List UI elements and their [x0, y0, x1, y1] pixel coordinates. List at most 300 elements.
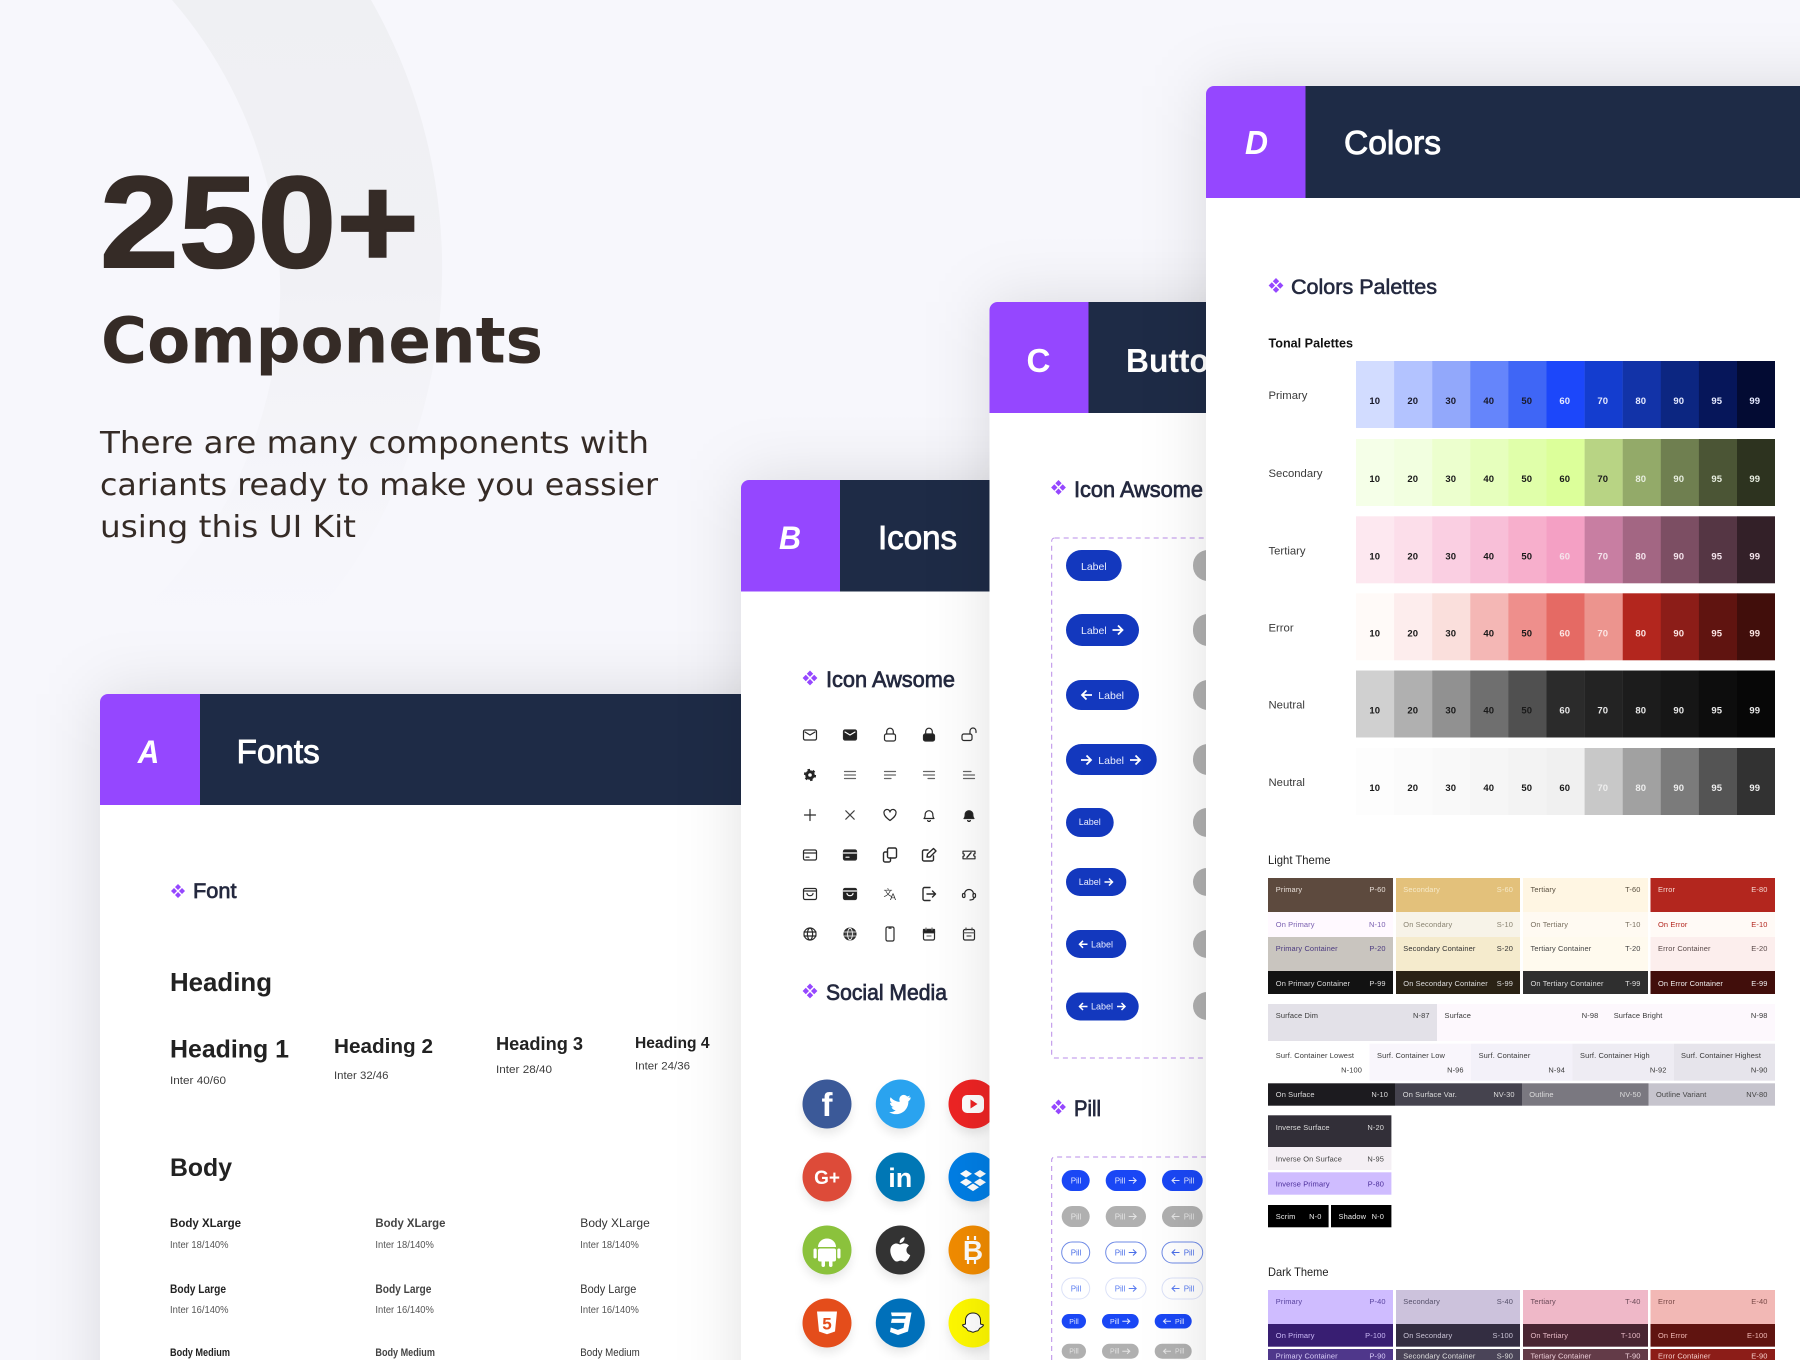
heading styles: Inter 40/60 — [170, 1075, 226, 1087]
panel D header — [1206, 86, 1800, 198]
dark theme: core color roles: Tertiary — [1530, 1297, 1556, 1306]
light theme: core color roles: T-10 — [1625, 920, 1640, 929]
light theme: core color roles: Secondary — [1403, 885, 1440, 894]
panel A header: A — [137, 734, 159, 770]
light theme: core color roles — [1268, 878, 1775, 994]
light theme: core color roles: On Primary — [1276, 920, 1315, 929]
heading: Pill — [1051, 1096, 1101, 1121]
description text: There are many components with — [99, 426, 649, 461]
button: label with both arrows — [1066, 744, 1157, 775]
light theme: inverse roles: Inverse On Surface — [1276, 1154, 1342, 1164]
tonal palette: primary: 60 — [1559, 396, 1570, 407]
subtitle: Components: Components — [101, 304, 543, 378]
tonal palette: primary: 40 — [1483, 396, 1494, 407]
tonal palette: neutral — [1268, 670, 1775, 738]
pills: disabled: Pill — [1071, 1212, 1082, 1221]
light theme: core color roles: E-20 — [1751, 944, 1768, 953]
icon: google plus — [802, 1152, 852, 1202]
pills: small disabled: Pill — [1175, 1349, 1185, 1356]
light theme: core color roles: On Secondary — [1403, 920, 1452, 929]
pills: small primary: Pill — [1069, 1319, 1079, 1326]
heading styles: Inter 24/36 — [635, 1060, 690, 1072]
tonal palette: error: 99 — [1749, 628, 1760, 639]
pills: small disabled — [1062, 1344, 1192, 1359]
tonal palette: tertiary: 30 — [1445, 551, 1456, 562]
light theme: core color roles: S-10 — [1497, 920, 1513, 929]
body styles: Inter 18/140% — [375, 1240, 434, 1251]
tonal palette: neutral light: 60 — [1559, 783, 1570, 794]
icon: facebook: f — [822, 1086, 834, 1123]
light theme: surface containers: Surf. Container Lowest — [1276, 1051, 1355, 1060]
icon: bell filled — [964, 811, 974, 821]
button: label with left arrow — [1066, 680, 1139, 710]
icon: google plus: G+ — [814, 1168, 840, 1189]
small button: both arrows: Label — [1091, 1002, 1113, 1012]
dark theme: core color roles: T-40 — [1625, 1297, 1640, 1306]
icon: linkedin: in — [888, 1163, 912, 1193]
tonal palette: error: 30 — [1445, 628, 1456, 639]
light theme: scrim and shadow — [1268, 1205, 1391, 1227]
icon: translate — [884, 886, 896, 902]
heading: Font: Font — [193, 880, 237, 903]
tonal palette: neutral: 99 — [1749, 706, 1760, 716]
description text — [99, 426, 659, 545]
button: label with right arrow: Label — [1081, 625, 1107, 637]
tonal palette: secondary: 90 — [1673, 474, 1684, 485]
tonal palette: neutral: 95 — [1711, 706, 1723, 716]
light theme: surface containers: N-100 — [1341, 1066, 1362, 1074]
tonal palette: tertiary — [1268, 516, 1775, 583]
pills: small disabled: Pill — [1110, 1349, 1120, 1356]
social media icons — [802, 1080, 998, 1353]
pills: primary: Pill — [1071, 1176, 1082, 1185]
body styles: Inter 16/140% — [375, 1305, 434, 1316]
panel A header: Fonts — [237, 733, 320, 770]
icon: align justify — [844, 772, 856, 778]
icon: dropbox — [948, 1152, 998, 1202]
tonal palette: secondary: 70 — [1597, 474, 1608, 485]
heading styles: Heading 3 — [496, 1033, 583, 1054]
tonal palette: neutral: 90 — [1673, 706, 1684, 716]
body styles: Body Large — [375, 1282, 432, 1296]
description text: using this UI Kit — [100, 510, 356, 545]
tonal palette: primary: 30 — [1445, 396, 1456, 407]
icon: android — [802, 1226, 852, 1274]
icon: discount ticket — [963, 851, 975, 859]
tonal palette: tertiary: 50 — [1521, 551, 1532, 562]
tonal palette: error: 60 — [1559, 628, 1570, 639]
description text: cariants ready to make you eassier — [100, 468, 659, 503]
icon: copy — [884, 848, 896, 862]
icon: snapchat — [948, 1298, 998, 1348]
icon: calendar filled — [924, 928, 934, 940]
icon: html5 — [802, 1298, 852, 1348]
light theme: core color roles: T-99 — [1625, 979, 1640, 988]
tonal palette: primary: 95 — [1711, 396, 1723, 407]
icon: globe filled — [844, 928, 856, 940]
dark theme: core color roles: Secondary — [1403, 1297, 1440, 1306]
body styles: Body XLarge — [375, 1216, 446, 1230]
tonal palette: error: 40 — [1483, 628, 1494, 639]
light theme: surface containers: N-94 — [1548, 1066, 1565, 1074]
tonal palette: tertiary: Tertiary — [1268, 545, 1306, 557]
light theme: core color roles: T-60 — [1625, 885, 1640, 894]
tonal palette: error: 95 — [1711, 628, 1723, 639]
pills: light outline: Pill — [1071, 1284, 1082, 1293]
light theme: surfaces: N-98 — [1582, 1011, 1598, 1020]
light theme: core color roles: E-99 — [1751, 979, 1768, 988]
light theme: on surface and outline: NV-80 — [1746, 1090, 1768, 1099]
tonal palette: tertiary: 95 — [1711, 551, 1723, 562]
icon: mobile phone — [886, 927, 894, 941]
panel D header: D — [1245, 124, 1268, 161]
pills: small primary: Pill — [1110, 1319, 1120, 1326]
panel C header: Buttons — [1126, 342, 1246, 379]
tonal palette: secondary: Secondary — [1268, 468, 1323, 480]
pills: small primary — [1062, 1314, 1192, 1328]
light theme: core color roles: Error — [1658, 885, 1676, 894]
tonal palette: tertiary: 80 — [1635, 551, 1646, 562]
icon: bitcoin: B — [963, 1235, 983, 1266]
light theme: surface containers: Surf. Container — [1479, 1051, 1531, 1060]
icon: linkedin — [876, 1152, 925, 1202]
tonal palette: error: 50 — [1521, 628, 1532, 639]
tonal palette: neutral light: 50 — [1521, 783, 1532, 794]
tonal palette: tertiary: 90 — [1673, 551, 1684, 562]
tonal palette: tertiary: 60 — [1559, 551, 1570, 562]
dark theme: core color roles: T-100 — [1621, 1331, 1640, 1340]
tonal palette: tertiary: 99 — [1749, 551, 1760, 562]
light theme: core color roles: Tertiary Container — [1530, 944, 1592, 953]
icon: mail filled — [844, 730, 856, 740]
light theme: surface containers: N-92 — [1650, 1066, 1666, 1074]
dark theme: core color roles: Error — [1658, 1297, 1676, 1306]
tonal palette: tertiary: 10 — [1369, 551, 1380, 562]
light theme: core color roles: On Primary Container — [1276, 979, 1351, 988]
tonal palette: neutral light: 99 — [1749, 783, 1760, 794]
small button: label — [1066, 808, 1114, 837]
light theme: on surface and outline: Outline — [1529, 1090, 1554, 1099]
body styles: Inter 16/140% — [170, 1305, 229, 1316]
pills: primary: Pill — [1184, 1176, 1195, 1185]
body styles: Body Medium — [580, 1347, 640, 1359]
dark theme: core color roles: E-40 — [1751, 1297, 1768, 1306]
small button: both arrows — [1066, 992, 1139, 1020]
panel D header: Colors — [1344, 124, 1441, 161]
light theme: core color roles: On Tertiary — [1530, 920, 1568, 929]
light theme: on surface and outline: NV-50 — [1620, 1090, 1641, 1099]
tonal palette: neutral: 40 — [1483, 706, 1494, 716]
light theme: inverse roles: N-20 — [1367, 1123, 1384, 1132]
body styles: Body XLarge — [170, 1216, 241, 1230]
panel A: fonts — [82, 676, 741, 1360]
button: label with left arrow: Label — [1098, 690, 1124, 702]
light theme: scrim and shadow: N-0 — [1309, 1212, 1322, 1221]
tonal palette: neutral light: 40 — [1483, 783, 1494, 794]
heading: Colors Palettes: Colors Palettes — [1291, 275, 1437, 299]
light theme: core color roles: On Tertiary Container — [1530, 979, 1604, 988]
light theme: core color roles: E-10 — [1751, 920, 1768, 929]
dark theme: core color roles: On Error — [1658, 1331, 1688, 1340]
pills: outline — [1062, 1242, 1203, 1263]
icon: globe outline — [804, 928, 816, 940]
tonal palette: primary: 70 — [1597, 396, 1608, 407]
dark theme: core color roles — [1268, 1290, 1775, 1360]
heading styles: Heading 1 — [170, 1036, 289, 1064]
tonal palette: neutral light: 80 — [1635, 783, 1646, 794]
panel B: icons — [723, 462, 990, 1360]
icon: plus — [804, 810, 816, 820]
panel C: buttons — [972, 284, 1206, 1360]
light theme: core color roles: On Error Container — [1658, 979, 1723, 988]
light theme: core color roles: On Secondary Container — [1403, 979, 1488, 988]
dashed pill group — [1052, 1157, 1260, 1360]
dark theme: core color roles: Primary — [1276, 1297, 1302, 1306]
icon: calendar outline — [964, 928, 974, 940]
icon: edit — [922, 848, 936, 861]
tonal palette: neutral: Neutral — [1268, 700, 1305, 712]
button: label with both arrows: Label — [1098, 755, 1124, 767]
heading styles — [170, 967, 710, 1087]
body styles: Inter 18/140% — [580, 1240, 639, 1251]
dark theme: core color roles: On Tertiary — [1530, 1331, 1568, 1340]
heading: Tonal Palettes: Tonal Palettes — [1268, 336, 1353, 350]
tonal palette: error: 80 — [1635, 628, 1646, 639]
tonal palette: primary: 10 — [1369, 396, 1380, 407]
panel C header — [990, 302, 1290, 413]
tonal palette: primary — [1268, 361, 1775, 428]
icon: unlock — [962, 728, 976, 740]
icon: css3 — [876, 1298, 925, 1348]
pills: outline: Pill — [1071, 1248, 1082, 1257]
tonal palette: secondary: 95 — [1711, 474, 1723, 485]
pills: disabled — [1062, 1206, 1203, 1227]
button: label with right arrow — [1066, 614, 1139, 646]
tonal palette: neutral: 70 — [1597, 706, 1608, 716]
tonal palette: neutral light: Neutral — [1268, 777, 1305, 789]
tonal palette: neutral: 80 — [1635, 706, 1646, 716]
light theme: core color roles: On Error — [1658, 920, 1688, 929]
light theme: surfaces: N-98 — [1751, 1011, 1768, 1020]
pills: small disabled: Pill — [1069, 1349, 1079, 1356]
light theme: scrim and shadow: N-0 — [1372, 1212, 1384, 1221]
light theme: core color roles: N-10 — [1369, 920, 1386, 929]
pills: disabled: Pill — [1184, 1212, 1195, 1221]
tonal palette: secondary: 40 — [1483, 474, 1494, 485]
light theme: surfaces: N-87 — [1413, 1011, 1430, 1020]
small button: label: Label — [1079, 817, 1101, 827]
dark theme: core color roles: P-100 — [1365, 1331, 1386, 1340]
icon: lock outline — [884, 728, 896, 741]
icon: headset — [962, 890, 976, 900]
light theme: scrim and shadow: Shadow — [1338, 1212, 1367, 1221]
light theme: surface containers — [1276, 1044, 1775, 1081]
pills: disabled: Pill — [1115, 1212, 1126, 1221]
icon: wallet filled — [844, 888, 856, 900]
light theme: core color roles: S-60 — [1497, 885, 1513, 894]
icon: html5: 5 — [822, 1314, 832, 1334]
body styles: Body Large — [170, 1282, 226, 1296]
tonal palette: secondary: 50 — [1521, 474, 1532, 485]
pills: light outline: Pill — [1184, 1284, 1195, 1293]
pills: primary — [1062, 1170, 1203, 1191]
tonal palette: secondary: 60 — [1559, 474, 1570, 485]
icon: apple — [876, 1226, 925, 1274]
icon: translate: A — [890, 892, 896, 902]
tonal palette: primary: 50 — [1521, 396, 1532, 407]
tonal palette: neutral light: 70 — [1597, 783, 1608, 794]
small button: left arrow — [1066, 930, 1126, 958]
light theme: inverse roles: P-80 — [1368, 1180, 1384, 1188]
tonal palette: secondary: 99 — [1749, 474, 1760, 485]
heading: Pill: Pill — [1074, 1096, 1101, 1121]
light theme: surfaces: Surface Bright — [1614, 1011, 1663, 1020]
icon: close — [846, 811, 854, 819]
dark theme: core color roles: On Primary — [1276, 1331, 1315, 1340]
light theme: core color roles: E-80 — [1751, 885, 1768, 894]
light theme: inverse roles: Inverse Surface — [1276, 1123, 1330, 1132]
light theme: core color roles: S-20 — [1497, 944, 1513, 953]
tonal palette: error: 90 — [1673, 628, 1684, 639]
body styles: Body Large — [580, 1282, 637, 1296]
tonal palette: neutral light: 95 — [1711, 783, 1723, 794]
light theme: scrim and shadow: Scrim — [1276, 1212, 1295, 1221]
tonal palette: tertiary: 20 — [1407, 551, 1418, 562]
light theme: surface containers: Surf. Container Low — [1377, 1051, 1446, 1060]
body styles — [170, 1154, 650, 1359]
icon: heart — [884, 809, 896, 820]
small button: left arrow: Label — [1091, 940, 1113, 950]
icon: mail outline — [804, 730, 816, 740]
body styles: Inter 16/140% — [580, 1305, 639, 1316]
icon: facebook — [802, 1080, 852, 1128]
dark theme: core color roles: S-100 — [1493, 1331, 1513, 1340]
icon grid — [804, 728, 976, 941]
light theme: core color roles: P-60 — [1369, 885, 1386, 894]
heading: Social Media: Social Media — [826, 980, 948, 1005]
light theme: core color roles: P-20 — [1369, 944, 1386, 953]
icon: bell outline — [924, 811, 934, 821]
small button: right arrow: Label — [1079, 877, 1101, 887]
dark theme: core color roles: On Secondary — [1403, 1331, 1452, 1340]
tonal palette: error — [1268, 593, 1775, 660]
icon: youtube — [948, 1080, 998, 1128]
light theme: core color roles: Secondary Container — [1403, 944, 1476, 953]
tonal palette: neutral: 60 — [1559, 706, 1570, 716]
light theme: on surface and outline: On Surface — [1276, 1090, 1315, 1099]
light theme: surfaces: Surface Dim — [1276, 1011, 1318, 1020]
button: label — [1066, 550, 1122, 581]
tonal palette: primary: 99 — [1749, 396, 1760, 407]
heading: Font — [171, 880, 237, 903]
tonal palette: primary: Primary — [1268, 390, 1308, 402]
body styles: Body Medium — [170, 1347, 230, 1359]
light theme: core color roles: Tertiary — [1530, 885, 1556, 894]
icon: card filled — [844, 850, 856, 860]
pills: primary: Pill — [1115, 1176, 1126, 1185]
light theme: core color roles: Primary Container — [1276, 944, 1338, 953]
icon: bitcoin — [948, 1226, 998, 1274]
icon: settings gear — [805, 770, 815, 780]
light theme: surface containers: N-96 — [1447, 1066, 1464, 1074]
icon: twitter — [876, 1080, 925, 1128]
icon: translate: 文 — [884, 886, 893, 899]
dark theme: core color roles: E-100 — [1747, 1331, 1768, 1340]
tonal palette: neutral light: 20 — [1407, 783, 1418, 794]
tonal palette: neutral: 30 — [1445, 706, 1456, 716]
heading: Icon Awsome: Icon Awsome — [1074, 477, 1203, 502]
panel C header: C — [1026, 342, 1050, 379]
light theme: on surface and outline: NV-30 — [1493, 1090, 1515, 1099]
pills: outline: Pill — [1184, 1248, 1195, 1257]
tonal palette: error: 20 — [1407, 628, 1418, 639]
dark theme: core color roles: P-40 — [1369, 1297, 1386, 1306]
light theme: surfaces: Surface — [1444, 1011, 1471, 1020]
light theme: inverse roles: N-95 — [1367, 1154, 1384, 1164]
pills: small primary: Pill — [1175, 1319, 1185, 1326]
heading styles: Heading 4 — [635, 1035, 710, 1052]
icon: align indent — [964, 772, 974, 778]
body styles: Body — [170, 1154, 232, 1182]
panel A header — [100, 694, 800, 805]
tonal palette: error: 70 — [1597, 628, 1608, 639]
tonal palette: error: Error — [1268, 622, 1294, 634]
tonal palette: neutral light: 90 — [1673, 783, 1684, 794]
light theme: surface containers: N-90 — [1751, 1066, 1768, 1074]
small button: right arrow — [1066, 868, 1126, 896]
heading: Light Theme: Light Theme — [1268, 853, 1331, 867]
light theme: on surface and outline: N-10 — [1371, 1090, 1388, 1099]
light theme: surfaces — [1268, 1004, 1775, 1041]
tonal palette: primary: 20 — [1407, 396, 1418, 407]
light theme: core color roles: T-20 — [1625, 944, 1640, 953]
icon: align right — [924, 772, 934, 778]
title: 250+: 250+ — [100, 149, 419, 295]
body styles: Body Medium — [375, 1347, 435, 1359]
light theme: core color roles: P-99 — [1369, 979, 1386, 988]
heading styles: Inter 32/46 — [334, 1070, 388, 1082]
tonal palette: neutral light: 10 — [1369, 783, 1380, 794]
icon: card outline — [804, 850, 816, 860]
tonal palette: neutral: 10 — [1369, 706, 1380, 716]
light theme: surface containers: Surf. Container Highest — [1681, 1051, 1762, 1060]
tonal palette: secondary: 80 — [1635, 474, 1646, 485]
light theme: core color roles: S-99 — [1497, 979, 1513, 988]
pills: light outline — [1062, 1278, 1203, 1299]
tonal palette: secondary — [1268, 439, 1775, 506]
tonal palette: neutral: 20 — [1407, 706, 1418, 716]
tonal palette: neutral light — [1268, 748, 1775, 815]
icon: align left — [884, 772, 896, 778]
pills: outline: Pill — [1115, 1248, 1126, 1257]
tonal palette: tertiary: 70 — [1597, 551, 1608, 562]
panel D: colors — [1188, 68, 1800, 1360]
heading styles: Heading 2 — [334, 1035, 433, 1058]
icon: wallet outline — [804, 888, 816, 900]
light theme: inverse roles: Inverse Primary — [1276, 1180, 1330, 1188]
dashed button group — [1052, 538, 1352, 1058]
light theme: core color roles: Error Container — [1658, 944, 1711, 953]
light theme: on surface and outline — [1268, 1083, 1775, 1106]
tonal palette: secondary: 30 — [1445, 474, 1456, 485]
tonal palette: secondary: 10 — [1369, 474, 1380, 485]
tonal palette: secondary: 20 — [1407, 474, 1418, 485]
tonal palette: primary: 90 — [1673, 396, 1684, 407]
body styles: Inter 18/140% — [170, 1240, 229, 1251]
heading styles: Inter 28/40 — [496, 1064, 552, 1076]
heading styles: Heading — [170, 967, 272, 997]
icon: lock filled — [924, 728, 934, 741]
